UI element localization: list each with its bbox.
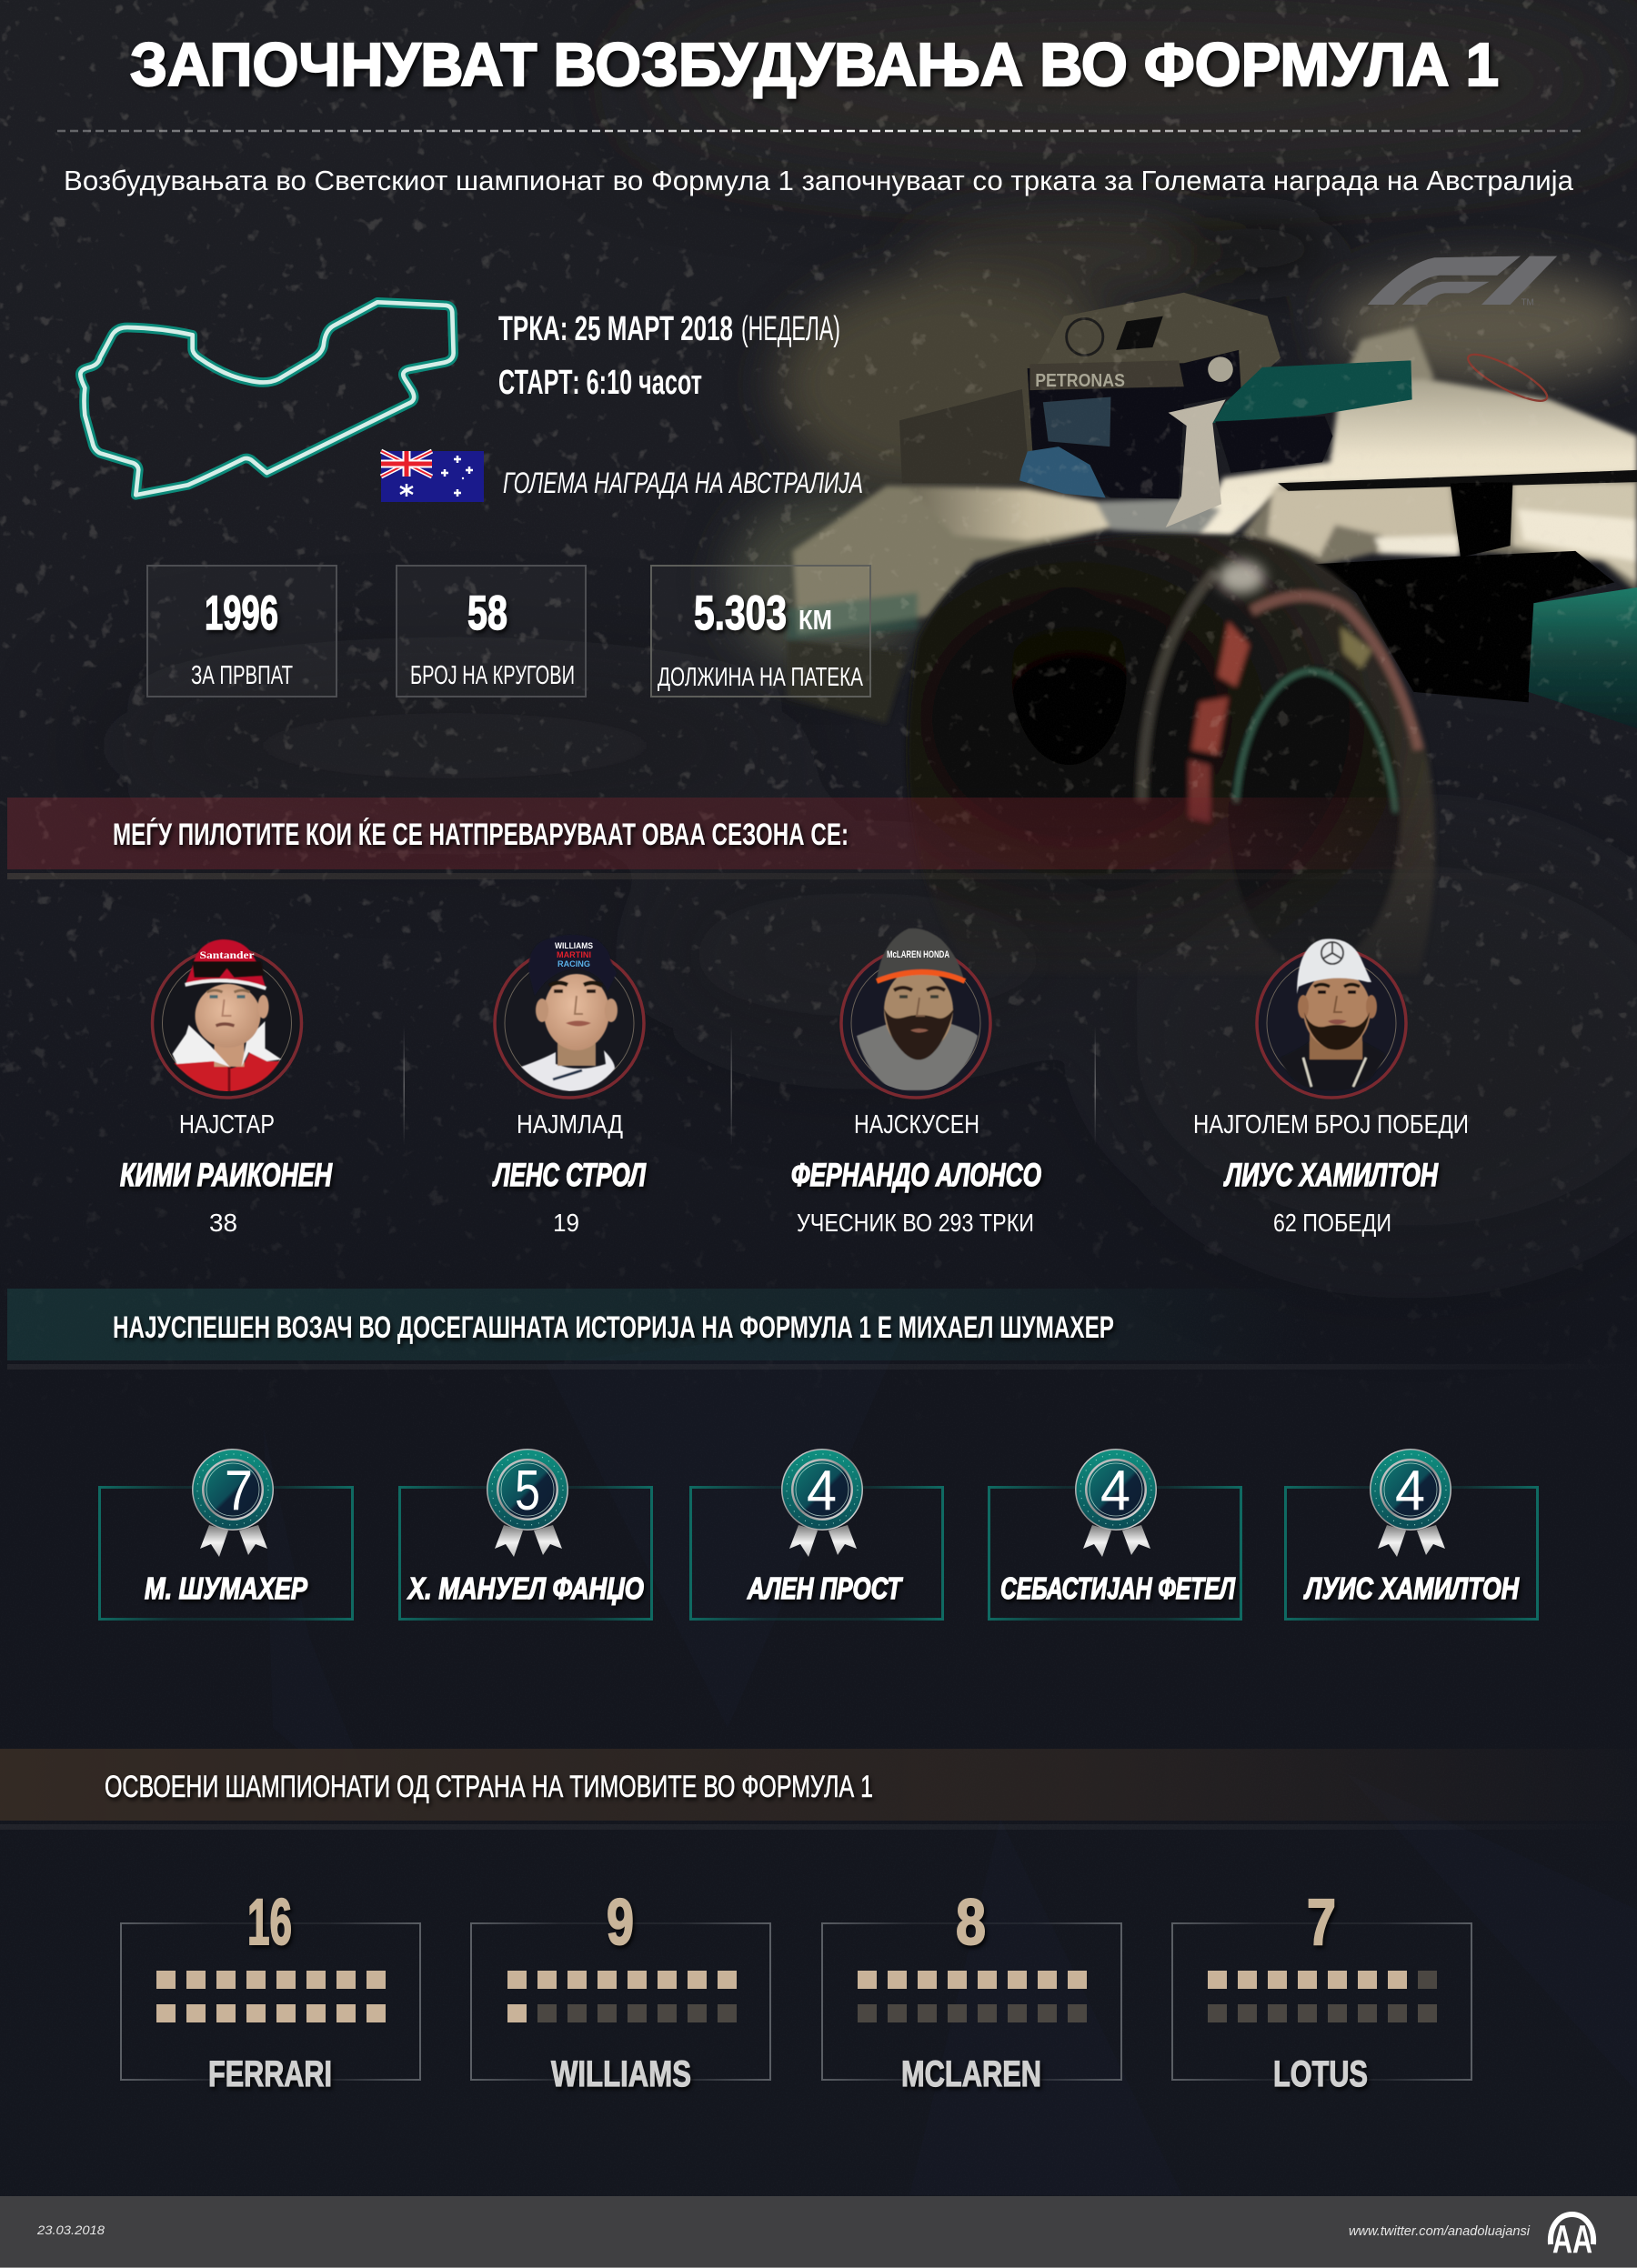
section band: most successful driver: НАЈУСПЕШЕН ВОЗАЧ ВО ДОСЕГАШНАТА ИСТОРИЈА НА ФОРМУЛА 1 Е МИХАЕЛ ШУМАХЕР: [113, 1310, 1114, 1345]
circuit map: [80, 302, 454, 495]
team card: Lotus: LOTUS: [1273, 2054, 1368, 2094]
team card: Ferrari: [121, 1887, 420, 2094]
driver text: most experienced: НАЈСКУСЕН: [854, 1110, 979, 1139]
stat: track length: [651, 566, 870, 697]
driver text: most experienced: УЧЕСНИК ВО 293 ТРКИ: [797, 1209, 1034, 1237]
driver portrait: Alonso: [841, 928, 990, 1098]
divider lines between drivers: [404, 1026, 1096, 1146]
champion card: Prost: 4: [807, 1460, 837, 1522]
sticker outline on bodywork: [1467, 353, 1548, 402]
champion card: Schumacher: [100, 1449, 353, 1619]
driver helmet: PETRONAS: [1035, 370, 1125, 391]
driver text: oldest: 38: [209, 1209, 237, 1237]
F1 logo: TM: [1522, 298, 1534, 308]
champion card: Vettel: 4: [1100, 1460, 1130, 1522]
driver portrait: Stroll: [495, 935, 644, 1098]
section band: team championships: ОСВОЕНИ ШАМПИОНАТИ ОД СТРАНА НА ТИМОВИТЕ ВО ФОРМУЛА 1: [105, 1770, 873, 1804]
champion card: Fangio: Х. МАНУЕЛ ФАНЏО: [407, 1571, 644, 1605]
driver text: most experienced: [791, 1110, 1041, 1237]
champion card: Fangio: 5: [515, 1460, 540, 1522]
date: 23.03.2018: [36, 2223, 105, 2237]
team card: McLaren: 8: [956, 1887, 986, 1959]
stat: first race: 1996: [205, 587, 278, 640]
background smoke haze: [91, 9, 1637, 1264]
section band: drivers: МЕЃУ ПИЛОТИТЕ КОИ ЌЕ СЕ НАТПРЕВАРУВААТ ОВАА СЕЗОНА СЕ:: [113, 818, 849, 852]
footer: [0, 2196, 1637, 2268]
driver portrait: Raikkonen: [153, 939, 302, 1098]
team card: McLaren: MCLAREN: [901, 2054, 1041, 2094]
subtitle: Возбудувањата во Светскиот шампионат во Формула 1 започнуваат со трката за Големата награда на Австралија: [64, 165, 1574, 196]
stat: laps: БРОЈ НА КРУГОВИ: [410, 661, 575, 690]
rear panel: [1241, 473, 1637, 593]
driver portrait: Stroll: MARTINI: [557, 950, 591, 959]
driver portrait: Alonso: McLAREN HONDA: [887, 949, 949, 960]
champion card: Hamilton: ЛУИС ХАМИЛТОН: [1303, 1571, 1520, 1605]
champion card: Fangio: [400, 1449, 651, 1619]
champion card: Schumacher: М. ШУМАХЕР: [145, 1571, 308, 1605]
F1 logo: [1368, 256, 1557, 308]
photo haze: [729, 212, 1637, 671]
front tyre: [908, 535, 1435, 974]
race date and start time: [498, 310, 840, 402]
driver text: most experienced: ФЕРНАНДО АЛОНСО: [791, 1158, 1041, 1193]
race date and start time: ТРКА: 25 МАРТ 2018: [498, 310, 733, 348]
section band: most successful driver: [7, 1289, 1637, 1370]
team card: Williams: WILLIAMS: [551, 2054, 691, 2094]
car body: [788, 326, 1637, 723]
race date and start time: СТАРТ: 6:10 часот: [498, 364, 702, 402]
stat: laps: [397, 566, 586, 697]
background facets: [264, 1319, 1637, 2195]
driver portrait: Stroll: RACING: [557, 959, 590, 968]
driver text: most wins: НАЈГОЛЕМ БРОЈ ПОБЕДИ: [1193, 1110, 1469, 1139]
driver helmet: [899, 293, 1280, 498]
champion card: Hamilton: 4: [1395, 1460, 1425, 1522]
driver text: oldest: [120, 1110, 333, 1237]
team card: Williams: 9: [607, 1887, 634, 1959]
driver portrait: Raikkonen: Santander: [200, 948, 255, 961]
stat: track length: КМ: [798, 604, 832, 636]
team card: Lotus: [1172, 1887, 1471, 2094]
stat: first race: [147, 566, 336, 697]
icon: Australian flag: [381, 451, 484, 502]
driver text: youngest: [492, 1110, 647, 1237]
stat: laps: 58: [467, 587, 507, 640]
section band: team championships: [0, 1749, 1637, 1830]
stat: track length: ДОЛЖИНА НА ПАТЕКА: [658, 663, 863, 692]
driver portrait: Hamilton: [1257, 938, 1406, 1098]
driver text: oldest: КИМИ РАИКОНЕН: [120, 1158, 333, 1193]
driver text: youngest: ЛЕНС СТРОЛ: [492, 1158, 647, 1193]
stat: track length: 5.303: [694, 587, 787, 640]
team card: Ferrari: FERRARI: [208, 2054, 332, 2094]
title: ЗАПОЧНУВАТ ВОЗБУДУВАЊА ВО ФОРМУЛА 1: [130, 31, 1499, 99]
section band: drivers: [7, 798, 1637, 879]
champion card: Prost: [691, 1449, 942, 1619]
tyre highlight: [1218, 560, 1265, 594]
champion card: Vettel: [989, 1449, 1240, 1619]
source link: www.twitter.com/anadoluajansi: [1349, 2223, 1531, 2239]
mirror and halo: [1166, 360, 1412, 527]
stat: first race: ЗА ПРВПАТ: [191, 661, 293, 690]
team card: Ferrari: 16: [247, 1887, 292, 1959]
driver text: most wins: [1193, 1110, 1469, 1237]
race car photo: [729, 212, 1637, 974]
icon: news agency logo: [1551, 2214, 1593, 2262]
team card: McLaren: [822, 1887, 1121, 2094]
team card: Williams: [471, 1887, 770, 2094]
driver text: oldest: НАЈСТАР: [179, 1110, 275, 1139]
driver text: youngest: 19: [553, 1209, 579, 1237]
driver portrait: Stroll: WILLIAMS: [555, 941, 593, 950]
champion card: Vettel: СЕБАСТИЈАН ФЕТЕЛ: [1000, 1571, 1236, 1605]
champion card: Schumacher: 7: [225, 1460, 253, 1522]
driver text: most wins: 62 ПОБЕДИ: [1273, 1209, 1391, 1237]
icon: news agency logo: AA: [1552, 2217, 1592, 2262]
champion card: Hamilton: [1286, 1449, 1537, 1619]
champion card: Prost: АЛЕН ПРОСТ: [747, 1571, 903, 1605]
driver text: most wins: ЛИУС ХАМИЛТОН: [1223, 1158, 1439, 1193]
grand prix label: ГОЛЕМА НАГРАДА НА АВСТРАЛИЈА: [503, 467, 863, 499]
dashed divider: [57, 130, 1582, 132]
driver text: youngest: НАЈМЛАД: [517, 1110, 623, 1139]
race date and start time: (НЕДЕЛА): [741, 310, 840, 348]
team card: Lotus: 7: [1307, 1887, 1336, 1959]
